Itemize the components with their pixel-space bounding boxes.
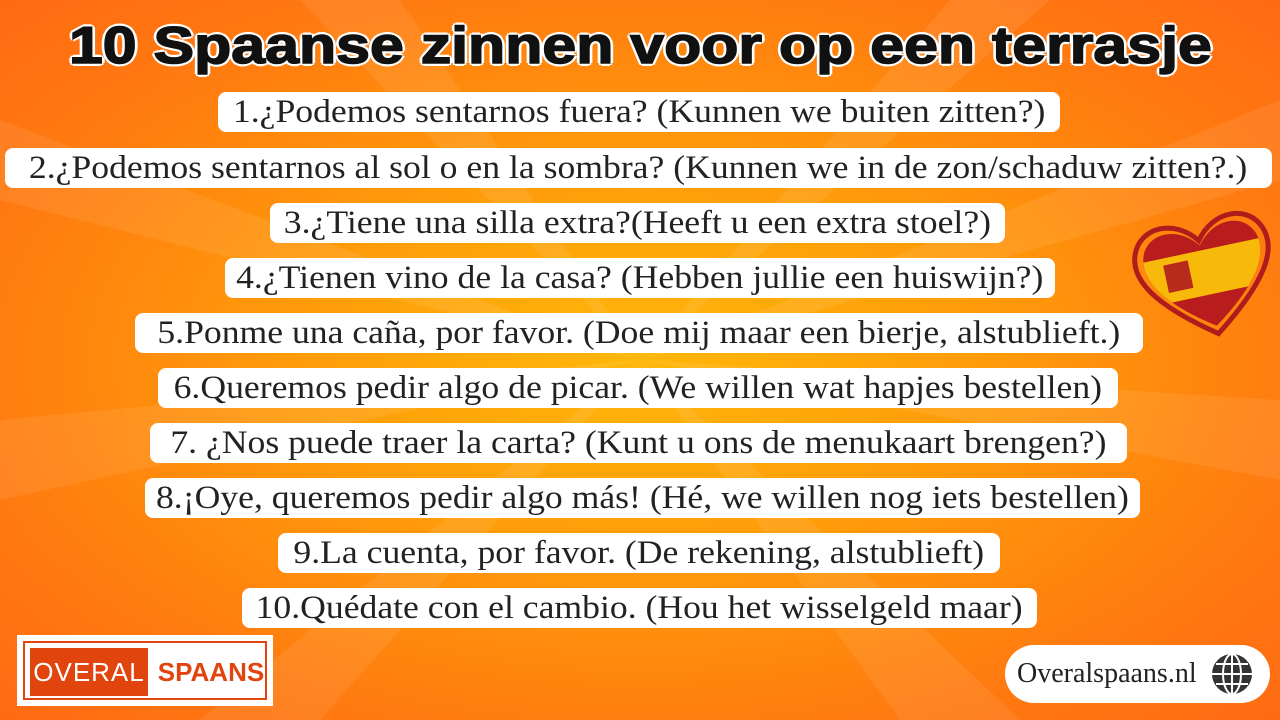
title: 10 Spaanse zinnen voor op een terrasje: [69, 17, 1211, 75]
website pill: [1005, 645, 1270, 703]
logo: OVERAL: [33, 657, 145, 687]
website pill: Overalspaans.nl: [1017, 658, 1197, 689]
phrase 2: 2.¿Podemos sentarnos al sol o en la sombra? (Kunnen we in de zon/schaduw zitten?.): [29, 150, 1248, 186]
phrase 5: 5.Ponme una caña, por favor. (Doe mij maar een bierje, alstublieft.): [158, 315, 1120, 351]
logo: [17, 635, 273, 706]
phrase 4: 4.¿Tienen vino de la casa? (Hebben jullie een huiswijn?): [236, 260, 1044, 296]
phrase 9: 9.La cuenta, por favor. (De rekening, alstublieft): [294, 535, 984, 571]
phrase 3: 3.¿Tiene una silla extra?(Heeft u een extra stoel?): [284, 205, 991, 241]
phrase 7: 7. ¿Nos puede traer la carta? (Kunt u ons de menukaart brengen?): [170, 425, 1107, 461]
logo: SPAANS: [158, 657, 264, 687]
phrase 6: 6.Queremos pedir algo de picar. (We willen wat hapjes bestellen): [174, 370, 1102, 406]
phrase 8: 8.¡Oye, queremos pedir algo más! (Hé, we willen nog iets bestellen): [156, 480, 1129, 516]
icon: globe: [1212, 654, 1252, 694]
icon: heart flag: [1132, 210, 1271, 337]
phrase 1: 1.¿Podemos sentarnos fuera? (Kunnen we buiten zitten?): [233, 94, 1045, 130]
phrase 10: 10.Quédate con el cambio. (Hou het wisselgeld maar): [256, 590, 1023, 626]
